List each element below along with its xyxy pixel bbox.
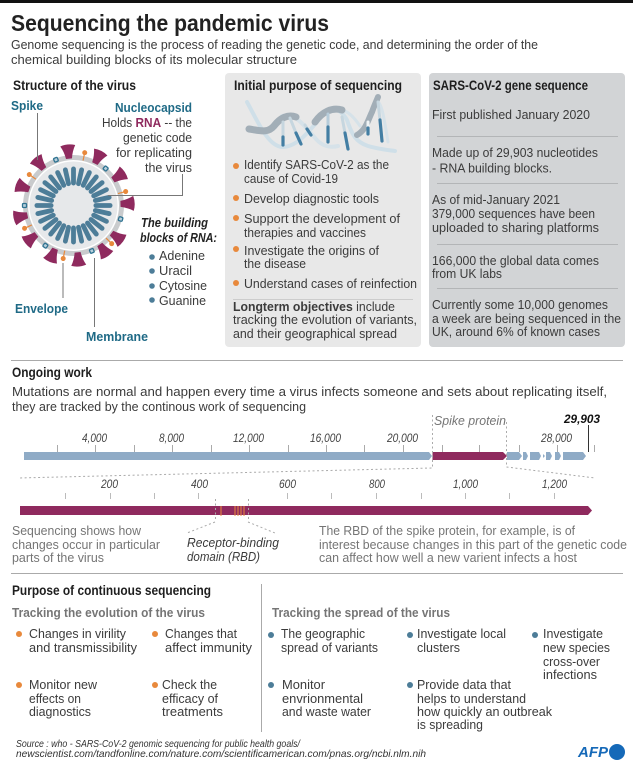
bullet list: initial purposes: Understand cases of reinfection (244, 276, 417, 291)
fact: nucleotides: - RNA building blocks. (432, 160, 552, 176)
column: spread of the virus: envrionmental (282, 691, 363, 706)
leader lines (38, 113, 182, 327)
fact: sequences uploaded: As of mid-January 2021 (432, 192, 560, 207)
text: RBD explanation: The RBD of the spike protein, for example, is of (319, 523, 575, 538)
panel: initial purpose of sequencing (225, 73, 421, 347)
column: evolution of the virus: diagnostics (29, 704, 91, 719)
bullet list: initial purposes: Support the development of (244, 211, 400, 226)
column: spread of the virus: helps to understand (417, 691, 526, 706)
building blocks list: blocks of RNA: (140, 230, 217, 245)
subtitle: chemical building blocks of its molecular structure (11, 52, 297, 67)
heading: ongoing work: Ongoing work (12, 365, 92, 380)
intro text: they are tracked by the continous work of sequencing (12, 399, 306, 414)
text: changes in parts of the virus (12, 523, 161, 565)
chart: spike protein bar: 400 (191, 479, 209, 491)
column: spread of the virus: Investigate (543, 626, 603, 641)
chart: genome sequence bar (18, 412, 600, 478)
column: spread of the virus: how quickly an outbreak (417, 704, 552, 719)
column: spread of the virus: and waste water (282, 704, 372, 719)
label: nucleocapsid: Holds RNA -- the (102, 115, 192, 130)
column: evolution of the virus: Check the (162, 677, 217, 692)
section: purpose of continuous sequencing (12, 583, 610, 732)
heading: initial purpose: Initial purpose of sequencing (234, 78, 402, 93)
text: changes in parts of the virus: changes occur in particular (12, 537, 161, 552)
source: newscientist.com/tandfonline.com/nature.com/scientificamerican.com/pnas.org/ncbi.nlm.nih (16, 748, 426, 760)
column: evolution of the virus: and transmissibility (29, 640, 137, 655)
fact: nucleotides: Made up of 29,903 nucleotides (432, 145, 598, 160)
bullet list: initial purposes: cause of Covid-19 (244, 171, 338, 186)
column: spread of the virus: infections (543, 667, 597, 682)
text: RBD explanation: can affect how well a new varient infects a host (319, 550, 577, 565)
column: spread of the virus (268, 605, 610, 732)
fact: weekly genomes: a week are being sequenced in the (432, 311, 621, 326)
fact: sequences uploaded (432, 192, 599, 235)
source (16, 738, 426, 760)
label: receptor-binding domain: domain (RBD) (187, 549, 260, 564)
building blocks list: Uracil (159, 263, 192, 278)
chart: genome sequence bar: 12,000 (233, 433, 265, 445)
bullet list: initial purposes: therapies and vaccines (244, 225, 366, 240)
building blocks list (140, 215, 217, 308)
column: evolution of the virus: efficacy of (162, 691, 218, 706)
fact: UK labs: from UK labs (432, 266, 502, 281)
chart: genome sequence bar: 8,000 (159, 433, 185, 445)
heading: gene sequence: SARS-CoV-2 gene sequence (433, 78, 588, 93)
label: nucleocapsid: Nucleocapsid (115, 100, 192, 115)
longterm objectives text: Longterm objectives include (233, 299, 395, 314)
panel: structure of the virus (11, 78, 217, 344)
fact: first published: First published January 2020 (432, 107, 590, 122)
column: spread of the virus: is spreading (417, 717, 483, 732)
fact: UK labs (432, 253, 599, 281)
chart: spike protein bar (20, 479, 592, 533)
fact: nucleotides (432, 145, 598, 176)
longterm objectives text (233, 299, 417, 341)
intro text (12, 384, 607, 414)
title: Sequencing the pandemic virus (11, 10, 329, 36)
label: spike: Spike (11, 98, 43, 113)
bullet list: initial purposes: the disease (244, 256, 306, 271)
longterm objectives text: and their geographical spread (233, 326, 397, 341)
fact: UK labs: 166,000 the global data comes (432, 253, 599, 268)
label: receptor-binding domain (187, 535, 280, 564)
label: nucleocapsid: for replicating (116, 145, 192, 160)
chart: spike protein bar: 1,200 (542, 479, 568, 491)
chart: genome sequence bar: 16,000 (310, 433, 342, 445)
chart: genome sequence bar: 4,000 (82, 433, 108, 445)
building blocks list: Guanine (159, 293, 206, 308)
logo: AFP: AFP (577, 744, 609, 761)
column: spread of the virus: Provide data that (417, 677, 511, 692)
chart: spike protein bar: 1,000 (453, 479, 479, 491)
label: receptor-binding domain: Receptor-binding (187, 535, 280, 550)
intro text: Mutations are normal and happen every time a virus infects someone and sets about replicating itself, (12, 384, 607, 399)
column: spread of the virus: cross-over (543, 654, 601, 669)
chart: genome sequence bar: 28,000 (540, 433, 573, 445)
building blocks list: Adenine (159, 248, 205, 263)
longterm objectives text: tracking the evolution of variants, (233, 312, 417, 327)
chart: spike protein bar: 200 (100, 479, 119, 491)
icon: virus diagram (12, 144, 135, 267)
column: evolution of the virus: Monitor new (29, 677, 98, 692)
label: spike protein: Spike protein (434, 413, 506, 428)
column: evolution of the virus: effects on (29, 691, 81, 706)
bullet list: initial purposes: Investigate the origins of (244, 243, 379, 258)
label: envelope: Envelope (15, 301, 68, 316)
subheading: spread: Tracking the spread of the virus (272, 605, 450, 620)
subtitle: Genome sequencing is the process of reading the genetic code, and determining the order of the (11, 37, 538, 52)
fact: weekly genomes (432, 297, 621, 339)
label: nucleocapsid: genetic code (123, 130, 192, 145)
column: spread of the virus: spread of variants (281, 640, 378, 655)
label: nucleocapsid (102, 100, 192, 175)
text: changes in parts of the virus: parts of the virus (12, 550, 104, 565)
column: spread of the virus: new species (543, 640, 610, 655)
text: RBD explanation (319, 523, 627, 565)
column: evolution of the virus: Changes that (165, 626, 237, 641)
column: evolution of the virus: treatments (162, 704, 223, 719)
bullet list: initial purposes: Develop diagnostic tools (244, 191, 379, 206)
panel: gene sequence (429, 73, 625, 347)
logo: AFP (577, 744, 625, 761)
fact: weekly genomes: Currently some 10,000 genomes (432, 297, 608, 312)
chart: spike protein bar: 600 (279, 479, 297, 491)
column: spread of the virus: clusters (417, 640, 460, 655)
chart: genome sequence bar: 20,000 (386, 433, 419, 445)
bullet list: initial purposes (233, 157, 417, 291)
column: evolution of the virus: Changes in virility (29, 626, 126, 641)
building blocks list: Cytosine (159, 278, 207, 293)
source: Source : who - SARS-CoV-2 genomic sequencing for public health goals/ (16, 738, 301, 750)
heading: structure: Structure of the virus (13, 78, 136, 93)
column: spread of the virus: Investigate local (417, 626, 506, 641)
text: changes in parts of the virus: Sequencing shows how (12, 523, 142, 538)
fact: sequences uploaded: 379,000 sequences have been (432, 206, 595, 221)
fact: sequences uploaded: uploaded to sharing platforms (432, 220, 599, 235)
column: evolution of the virus (12, 605, 252, 719)
building blocks list: The building (141, 215, 208, 230)
column: evolution of the virus: affect immunity (165, 640, 252, 655)
heading: purpose: Purpose of continuous sequencing (12, 583, 211, 598)
label: nucleocapsid: the virus (145, 160, 192, 175)
label: total length (563, 412, 600, 452)
icon: DNA helix (247, 97, 395, 151)
section: ongoing work (12, 365, 627, 565)
label: total length: 29,903 (563, 412, 600, 426)
column: spread of the virus: Monitor (282, 677, 326, 692)
subtitle (11, 37, 538, 67)
column: spread of the virus: The geographic (281, 626, 365, 641)
fact: weekly genomes: UK, around 6% of known cases (432, 324, 600, 339)
label: membrane: Membrane (86, 329, 148, 344)
subheading: evolution: Tracking the evolution of the virus (12, 605, 205, 620)
chart: spike protein bar: 800 (369, 479, 386, 491)
bullet list: initial purposes: Identify SARS-CoV-2 as the (244, 157, 389, 172)
